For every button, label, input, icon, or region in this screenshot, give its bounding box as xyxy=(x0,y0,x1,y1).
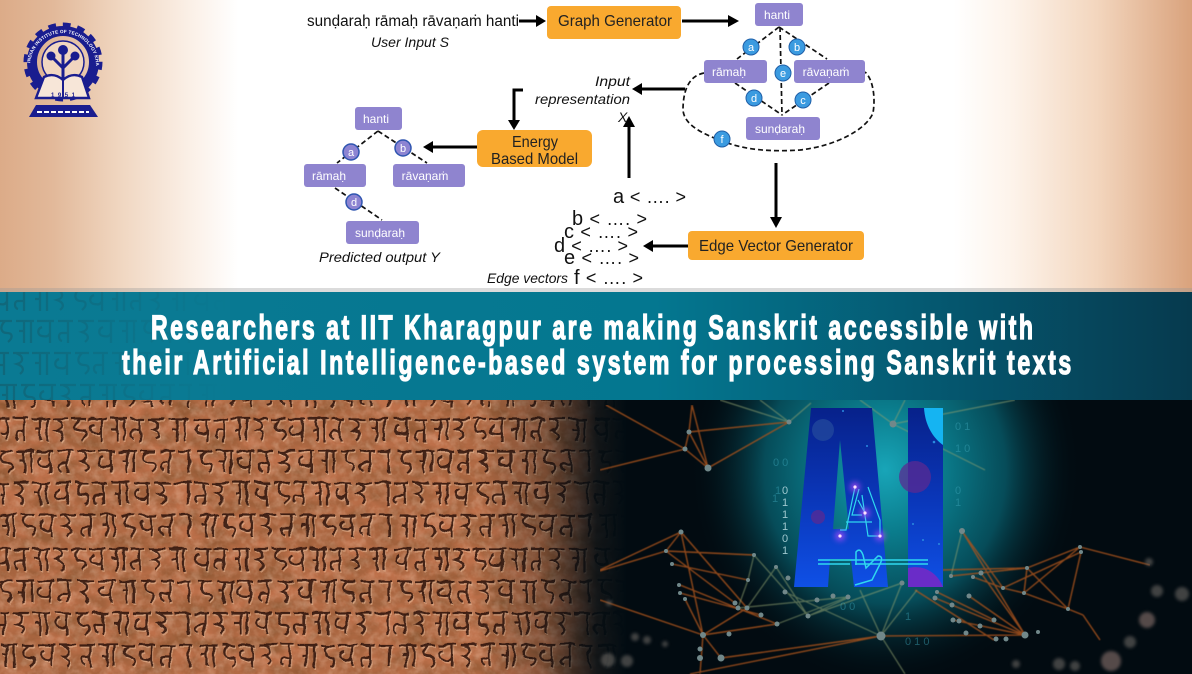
faint binary columns: 1 xyxy=(772,493,778,505)
faded script texture xyxy=(0,292,230,400)
edge labels a to f: a xyxy=(748,42,755,54)
input representation label: Input xyxy=(595,73,631,89)
node: ramah xyxy=(304,164,366,187)
faint binary columns: 1 xyxy=(775,485,781,497)
logo: IIT Kharagpur crest: 1951 xyxy=(51,93,76,99)
edge labels a, b, d: d xyxy=(351,197,357,209)
photo: AI network background xyxy=(480,400,1192,674)
edge labels a to f xyxy=(714,39,811,147)
edge labels a to f: c xyxy=(800,95,806,107)
edge labels a, b, d: b xyxy=(400,143,406,155)
bottom planet xyxy=(908,567,943,587)
edge labels a to f: f xyxy=(720,134,724,146)
banner: title strip xyxy=(0,292,1192,400)
faint binary columns: 0 1 0 xyxy=(905,636,929,648)
binary digits: 0 xyxy=(782,485,788,497)
edge vectors list: b < …. > xyxy=(572,208,647,230)
node: ravanam xyxy=(794,60,865,83)
network lines xyxy=(600,405,1150,674)
title: their Artificial Intelligence-based system for processing Sanskrit texts xyxy=(122,345,1071,382)
box: Graph Generator: Graph Generator xyxy=(558,13,673,30)
predicted graph xyxy=(304,107,465,244)
faint binary columns: 1 xyxy=(955,497,961,509)
edge labels a, b, d: a xyxy=(348,147,355,159)
predicted output label: Predicted output Y xyxy=(319,249,442,265)
node: ramah: rāmaḥ xyxy=(712,65,746,79)
edge vectors label: Edge vectors xyxy=(487,270,568,286)
binary digits: 1 xyxy=(782,545,788,557)
diagram: Sanskrit dependency parsing pipeline xyxy=(304,3,874,289)
user input label: User Input S xyxy=(371,34,450,50)
faint binary columns: 0 xyxy=(955,485,961,497)
node: hanti xyxy=(355,107,402,130)
edge vectors list xyxy=(554,186,686,289)
binary digits xyxy=(782,485,788,557)
input representation label: representation xyxy=(535,91,630,107)
node: ravanam xyxy=(393,164,465,187)
photo: engraved Devanagari stone panel xyxy=(0,400,640,674)
binary digits: 1 xyxy=(782,497,788,509)
circuit dots xyxy=(838,485,882,538)
faint binary columns: 0 0 xyxy=(840,601,855,613)
AI lettering xyxy=(794,408,943,587)
box: Graph Generator xyxy=(547,6,681,39)
binary digits: 0 xyxy=(782,533,788,545)
candidate graph xyxy=(683,3,874,151)
box: Edge Vector Generator xyxy=(688,231,864,260)
arrow: energy model to predicted output xyxy=(423,141,477,153)
edge labels a to f: e xyxy=(780,68,786,80)
box: Edge Vector Generator: Edge Vector Generator xyxy=(699,238,854,255)
arrow: graph down to edge vector generator xyxy=(770,163,782,228)
box: Energy Based Model xyxy=(477,130,592,168)
letter A xyxy=(794,408,888,587)
arrow: graph to input representation xyxy=(632,83,685,95)
crescent planet xyxy=(924,408,943,445)
node: sundarah: sunḍaraḥ xyxy=(755,122,805,136)
top panel background xyxy=(0,0,1192,292)
box: Energy Based Model: Energy xyxy=(512,134,558,151)
input representation label: X xyxy=(617,109,628,125)
node: hanti xyxy=(755,3,803,26)
edge vectors list: e < …. > xyxy=(564,247,639,269)
input representation label xyxy=(535,73,631,125)
arrow: graph generator to graph xyxy=(682,15,739,27)
logo: IIT Kharagpur crest xyxy=(24,22,102,117)
edge labels a to f: b xyxy=(794,42,800,54)
binary digits: 1 xyxy=(782,509,788,521)
purple planets xyxy=(811,419,931,524)
arrow: edge vector generator to edge vectors xyxy=(643,240,688,252)
node: sundarah: sunḍaraḥ xyxy=(355,226,405,240)
edge vectors list: f < …. > xyxy=(574,267,643,289)
box: Energy Based Model: Based Model xyxy=(491,151,578,168)
network nodes xyxy=(664,420,1083,662)
node: ravanam: rāvaṇaṁ xyxy=(402,169,448,183)
node: ramah: rāmaḥ xyxy=(312,169,346,183)
node: hanti: hanti xyxy=(363,112,389,126)
faint binary columns: 0 1 xyxy=(955,421,970,433)
circuit glow nodes xyxy=(835,482,885,541)
title: Researchers at IIT Kharagpur are making Sanskrit accessible with xyxy=(151,310,1033,347)
node: sundarah xyxy=(746,117,820,140)
faint binary columns: 1 0 xyxy=(955,443,970,455)
edge vectors list: c < …. > xyxy=(564,221,638,243)
faint binary columns: 0 0 xyxy=(773,457,788,469)
edge labels a to f: d xyxy=(751,93,757,105)
sparkle dots xyxy=(842,410,940,545)
title xyxy=(122,310,1071,382)
faint binary columns: 1 xyxy=(905,611,911,623)
node: hanti: hanti xyxy=(764,8,790,22)
edge labels a, b, d xyxy=(343,140,411,210)
edge vectors list: d < …. > xyxy=(554,235,628,257)
node: ravanam: rāvaṇaṁ xyxy=(803,65,849,79)
edge vectors list: a < …. > xyxy=(613,186,686,208)
node: sundarah xyxy=(346,221,419,244)
letter I xyxy=(908,408,943,587)
arrow: input to graph generator xyxy=(519,15,546,27)
circuit A xyxy=(818,487,928,585)
arrow: edge vectors up to input representation xyxy=(623,116,635,178)
faint binary columns xyxy=(772,421,970,648)
user input sentence: sunḍaraḥ rāmaḥ rāvaṇaṁ hanti xyxy=(307,13,519,30)
binary digits: 1 xyxy=(782,521,788,533)
arrow: input representation to energy model xyxy=(508,90,523,130)
blurred bokeh lights xyxy=(601,558,1189,671)
soft shadow above banner xyxy=(0,288,1192,292)
node: ramah xyxy=(704,60,767,83)
